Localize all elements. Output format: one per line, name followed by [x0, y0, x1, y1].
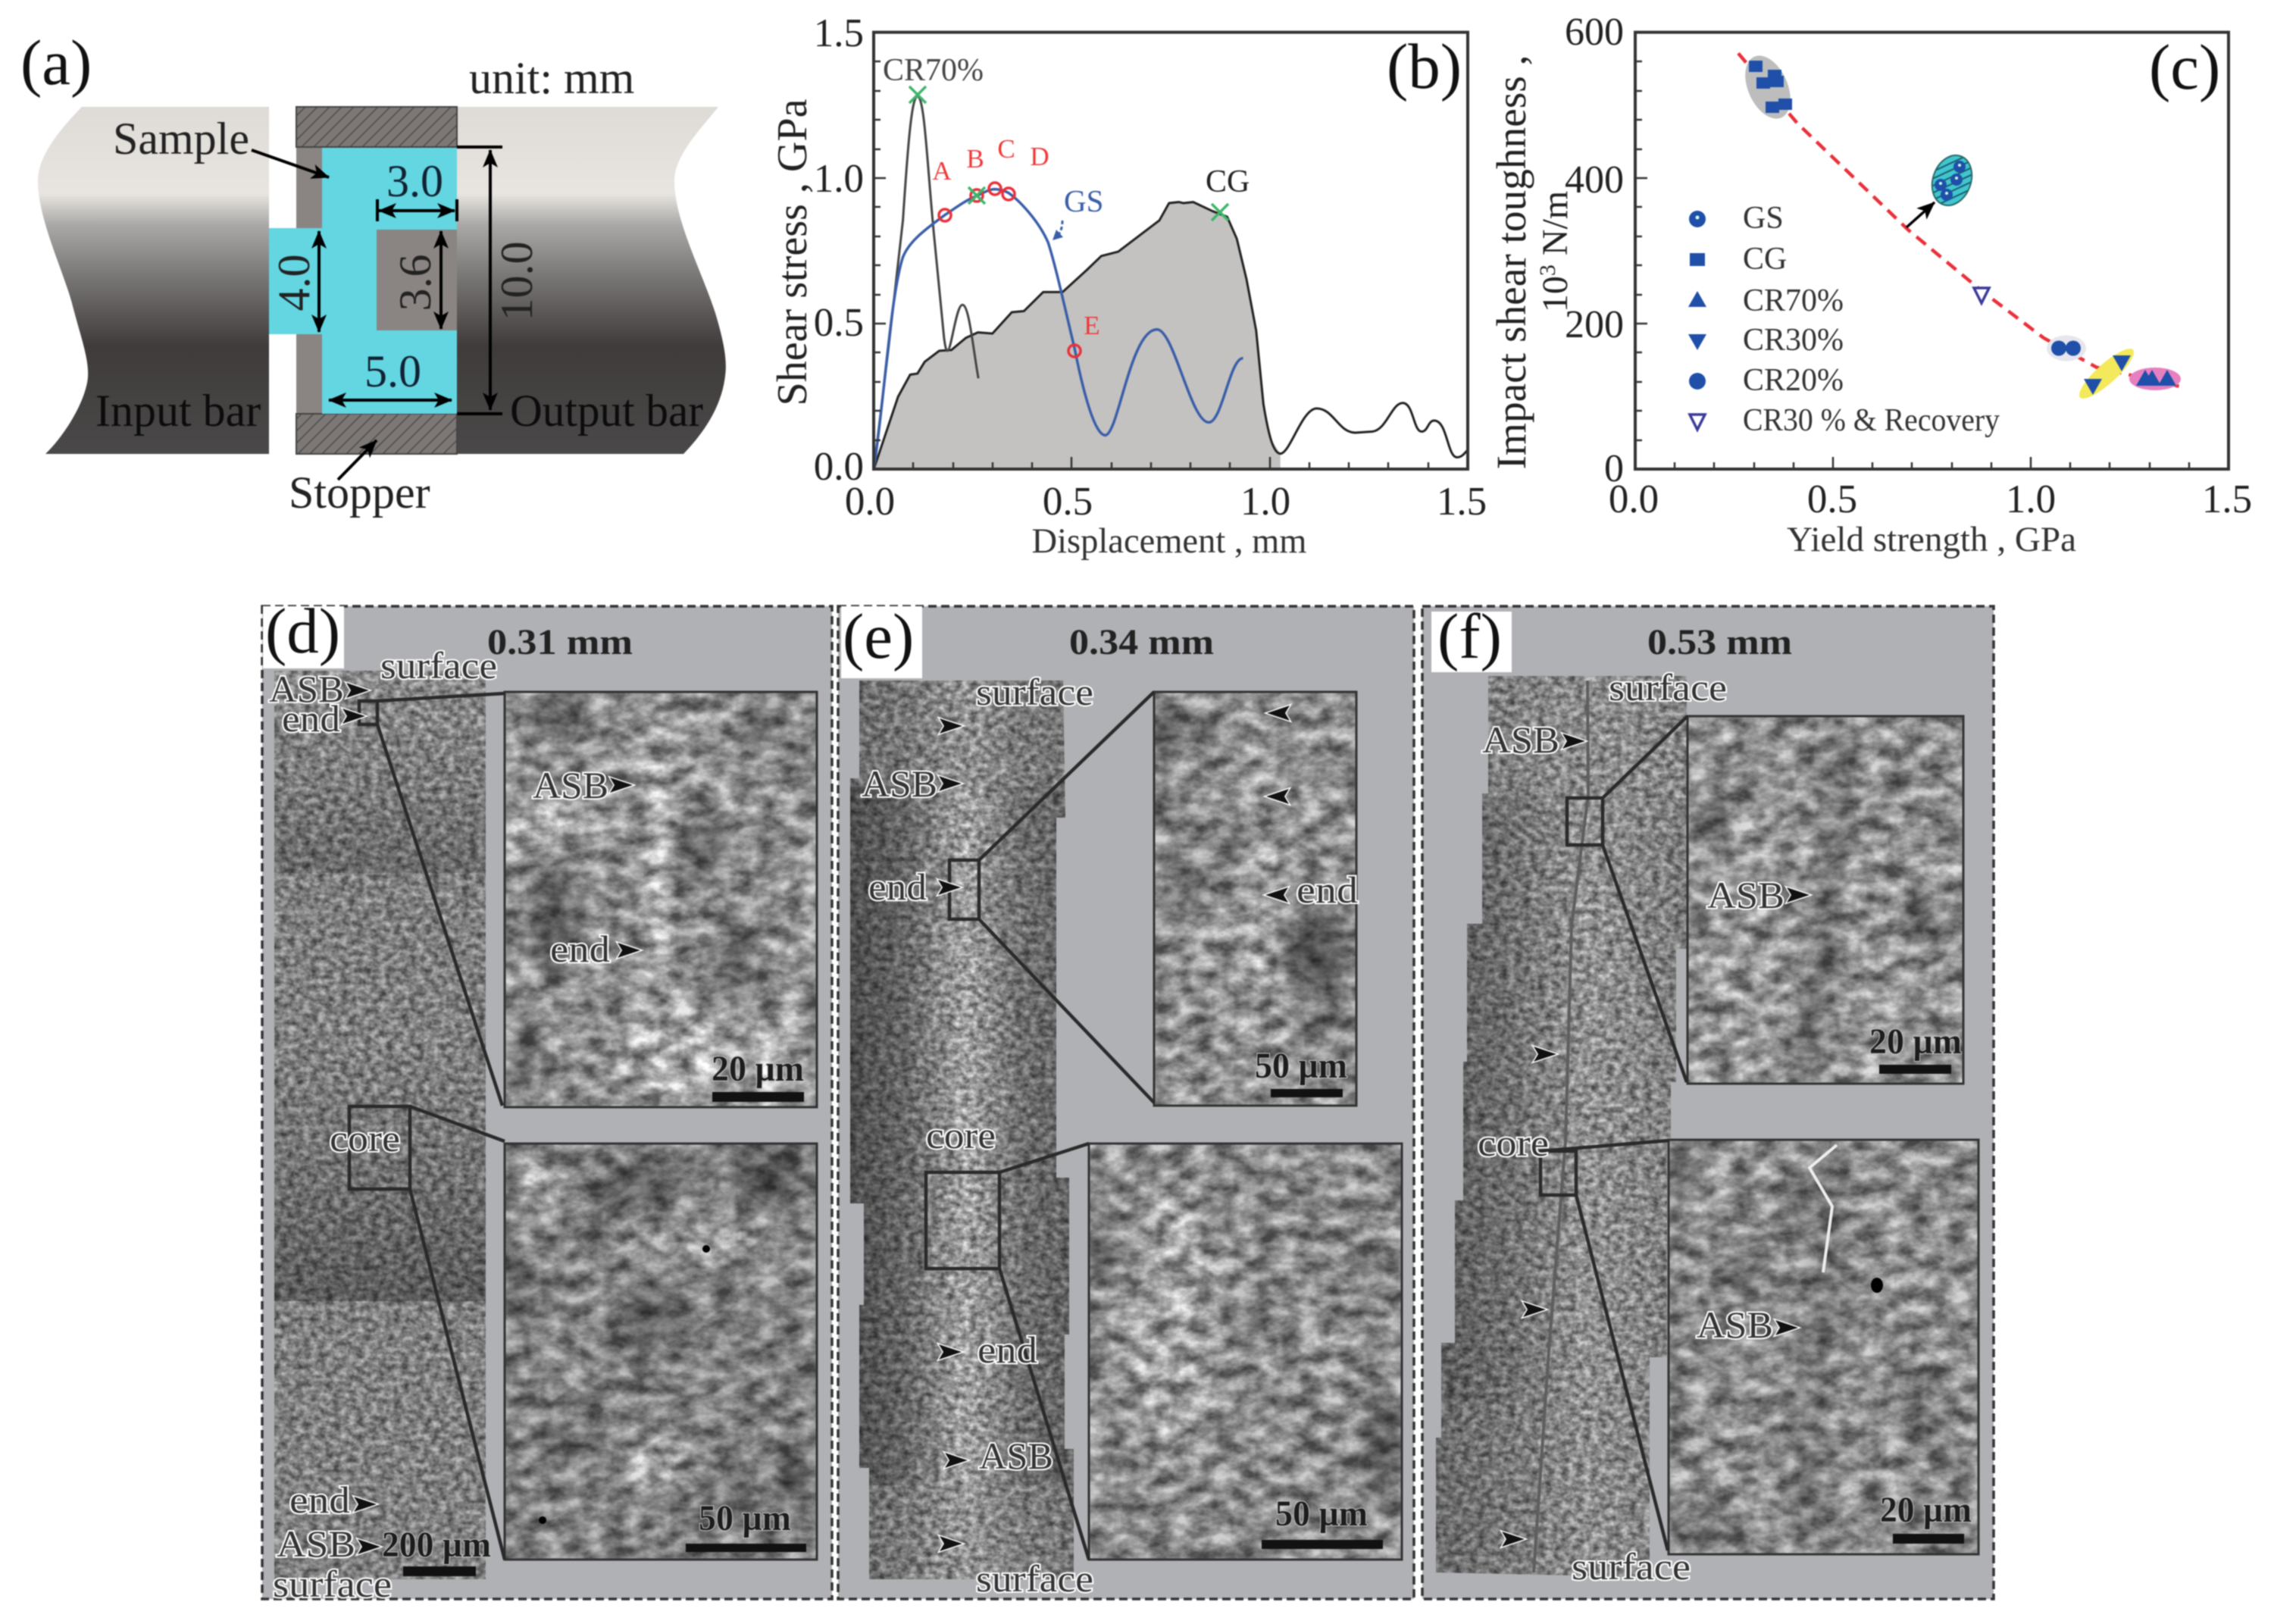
legend: CR30%	[1743, 323, 1844, 358]
zoom boxes and lines	[349, 693, 505, 1560]
CG curve	[874, 202, 1468, 469]
scale bar upper inset: 50 µm	[1255, 1046, 1347, 1086]
inset: upper ASB micrograph	[1688, 716, 1963, 1084]
core label: core	[330, 1117, 400, 1159]
band arrow lower	[1502, 1532, 1525, 1547]
panel d: micrographs at 0.31 mm	[262, 596, 832, 1605]
GS curve	[874, 189, 1243, 469]
label box (f)	[1431, 612, 1512, 672]
core label: core	[926, 1114, 996, 1156]
scale bar lower inset	[1262, 1494, 1383, 1549]
end label with arrow: end	[868, 865, 927, 908]
stopper label: Stopper	[289, 468, 430, 518]
red point labels	[932, 134, 1100, 340]
arrow to stopper	[338, 440, 377, 480]
stopper bottom hatch	[296, 414, 457, 454]
dimension 10.0	[457, 147, 542, 414]
scale bar upper inset: 20 µm	[1869, 1022, 1962, 1062]
band arrow bottom	[940, 1536, 962, 1551]
x axis tick labels: 0.0	[845, 480, 895, 524]
red point labels: B	[966, 144, 984, 174]
dimension 5.0: 5.0	[364, 346, 421, 396]
GS pointer arrow	[1053, 221, 1063, 240]
zoom boxes and lines	[926, 692, 1154, 1560]
dimension 10.0: 10.0	[492, 241, 542, 321]
dimension 4.0	[269, 231, 319, 332]
output bar	[457, 107, 726, 454]
stitched micrograph strip	[1436, 676, 1687, 1578]
inset: ASB end micrograph	[505, 692, 818, 1107]
y axis tick labels: 0	[1604, 447, 1624, 490]
panel background	[262, 606, 832, 1599]
scale bar lower inset: 50 µm	[1275, 1494, 1368, 1534]
sample label: Sample	[113, 114, 249, 164]
scale bar 50 um: 50 µm	[699, 1498, 791, 1538]
GS data cluster	[1925, 149, 1978, 211]
scale bar 50 um	[686, 1498, 806, 1552]
axes frame	[874, 33, 1468, 469]
inset: upper ASB micrograph	[1150, 692, 1356, 1106]
lower end label with arrow	[939, 1328, 1037, 1371]
label box (d)	[263, 606, 344, 668]
y axis unit: 10	[1535, 276, 1575, 312]
label (a): (a)	[20, 27, 92, 99]
red point labels: C	[997, 134, 1015, 164]
dimension 3.6: 3.6	[390, 255, 440, 311]
x axis title: Displacement , mm	[1032, 521, 1306, 561]
inset ASB label with arrow: ASB	[1707, 874, 1784, 916]
lower end label with arrow: end	[977, 1328, 1037, 1371]
lower inset ASB label with arrow: ASB	[1697, 1303, 1773, 1346]
legend: CR30 % & Recovery	[1743, 403, 2000, 438]
crack	[1810, 1145, 1837, 1272]
distance heading: 0.53 mm	[1647, 622, 1792, 662]
panel background	[838, 606, 1414, 1599]
inset arrows	[1265, 706, 1290, 903]
stitched micrograph strip	[850, 681, 1074, 1579]
x axis tick labels: 1.0	[1240, 480, 1290, 524]
surface label top: surface	[1609, 666, 1727, 709]
y axis tick labels	[1565, 11, 1624, 490]
x axis title: Yield strength , GPa	[1787, 520, 2076, 559]
legend: CG	[1743, 242, 1787, 277]
distance heading: 0.31 mm	[487, 622, 633, 662]
legend	[1688, 201, 2000, 438]
CG filled area	[874, 202, 1281, 469]
end label with arrow	[868, 865, 961, 908]
pore	[1871, 1278, 1883, 1293]
ASB label with arrow: ASB	[862, 762, 937, 805]
axes frame	[1635, 33, 2229, 469]
x axis tick labels: 0.5	[1807, 477, 1857, 521]
stitched micrograph strip	[274, 671, 486, 1579]
y axis tick labels: 0.5	[814, 301, 864, 345]
surface label bottom: surface	[976, 1557, 1093, 1600]
red point labels: E	[1084, 311, 1100, 340]
zoom boxes and lines	[1541, 716, 1688, 1550]
y axis tick labels: 600	[1565, 11, 1624, 54]
y axis tick labels: 1.0	[814, 157, 864, 201]
inset ASB label with arrow: ASB	[533, 764, 608, 806]
y axis tick labels: 0.0	[814, 445, 864, 489]
scale bar lower inset: 20 µm	[1880, 1490, 1972, 1530]
band arrow upper	[1534, 1047, 1556, 1062]
CG data cluster	[1736, 49, 1800, 126]
x axis tick labels: 1.0	[2006, 477, 2056, 521]
y axis title: Shear stress , GPa	[769, 99, 816, 406]
y axis tick labels: 1.5	[814, 11, 864, 55]
x axis tick labels	[1609, 477, 2252, 521]
dimension 3.6	[390, 231, 441, 329]
legend: GS	[1743, 201, 1784, 236]
panel f: micrographs at 0.53 mm	[1422, 601, 1994, 1599]
label (e): (e)	[843, 601, 914, 672]
inset end label with arrow	[550, 928, 640, 970]
surface label bottom: surface	[273, 1563, 392, 1605]
label (c): (c)	[2149, 32, 2220, 103]
sample shape	[269, 148, 457, 414]
legend: CR70%	[1743, 283, 1844, 318]
ASB label with arrow: ASB	[1482, 718, 1559, 761]
stopper top hatch	[296, 107, 457, 147]
ASB label top with arrow: ASB	[269, 668, 344, 710]
red point labels: D	[1030, 142, 1049, 171]
y axis title: Impact shear toughness ,	[1488, 55, 1534, 470]
inset: core ASB micrograph	[1669, 1140, 1978, 1554]
inset end label: end	[1297, 868, 1358, 911]
label (d): (d)	[265, 596, 340, 667]
y axis unit: N/m	[1535, 191, 1575, 264]
arrow to GS cluster	[1906, 202, 1935, 227]
y axis tick labels	[814, 11, 864, 489]
end label bottom with arrow	[289, 1478, 377, 1521]
GS label: GS	[1064, 183, 1103, 218]
band arrow middle	[1523, 1302, 1546, 1317]
y axis unit: 3	[1535, 264, 1560, 276]
dimension 3.0: 3.0	[386, 156, 443, 206]
stopper body	[296, 146, 457, 414]
panel e: micrographs at 0.34 mm	[838, 601, 1414, 1600]
y axis tick labels: 200	[1565, 303, 1624, 346]
lower ASB label with arrow: ASB	[979, 1435, 1053, 1477]
red point labels: A	[932, 156, 952, 186]
x axis tick labels: 1.5	[1437, 480, 1487, 524]
surface label top: surface	[380, 644, 497, 687]
x axis tick labels	[845, 480, 1487, 524]
core label: core	[1478, 1122, 1549, 1164]
x axis tick labels: 1.5	[2202, 477, 2252, 521]
shear band trace	[1534, 681, 1588, 1572]
y axis tick labels: 400	[1565, 158, 1624, 202]
output bar label: Output bar	[510, 386, 703, 436]
surface label top: surface	[976, 671, 1093, 713]
CG label: CG	[1206, 164, 1250, 199]
inset: core micrograph	[1089, 1144, 1402, 1560]
lower ASB label with arrow	[945, 1435, 1053, 1477]
inset end label with arrow: end	[550, 928, 610, 970]
CR20% data cluster	[2047, 335, 2086, 361]
CR70% label: CR70%	[883, 53, 984, 88]
green failure crosses	[909, 86, 1228, 221]
panel b: shear stress vs displacement chart	[769, 11, 1487, 561]
pores	[539, 1245, 710, 1524]
dimension 3.0	[377, 156, 457, 221]
input bar label: Input bar	[95, 386, 261, 436]
surface label bottom: surface	[1572, 1545, 1691, 1588]
panel a: shear test schematic	[20, 27, 726, 518]
panel background	[1422, 606, 1994, 1599]
end label top with arrow: end	[282, 697, 340, 740]
x axis tick labels: 0.5	[1043, 480, 1093, 524]
red dashed trend line	[1738, 53, 2185, 387]
scale bar 200 um: 200 µm	[382, 1525, 491, 1565]
CR30% data cluster	[2073, 343, 2140, 405]
input bar	[38, 107, 269, 454]
CR30% and recovery point	[1974, 288, 1989, 303]
ASB label bottom with arrow: ASB	[277, 1522, 355, 1565]
label (b): (b)	[1387, 31, 1462, 102]
label (f): (f)	[1437, 601, 1502, 672]
CR70% curve	[874, 96, 978, 469]
arrow to sample	[252, 150, 329, 177]
CR70% data cluster	[2129, 368, 2181, 390]
distance heading: 0.34 mm	[1069, 622, 1214, 662]
end label bottom with arrow: end	[289, 1478, 350, 1521]
band arrow top	[940, 718, 962, 734]
label box (e)	[841, 606, 922, 678]
legend: CR20%	[1743, 363, 1844, 398]
red point markers	[939, 183, 1081, 357]
panel c: toughness vs yield strength chart	[1488, 11, 2252, 559]
end label top with arrow	[282, 697, 365, 740]
scale bar 20 um: 20 µm	[712, 1049, 804, 1089]
dimension 4.0: 4.0	[269, 255, 319, 311]
unit note: unit: mm	[469, 53, 634, 103]
x axis tick labels: 0.0	[1609, 477, 1659, 521]
inset: core micrograph	[505, 1144, 817, 1560]
